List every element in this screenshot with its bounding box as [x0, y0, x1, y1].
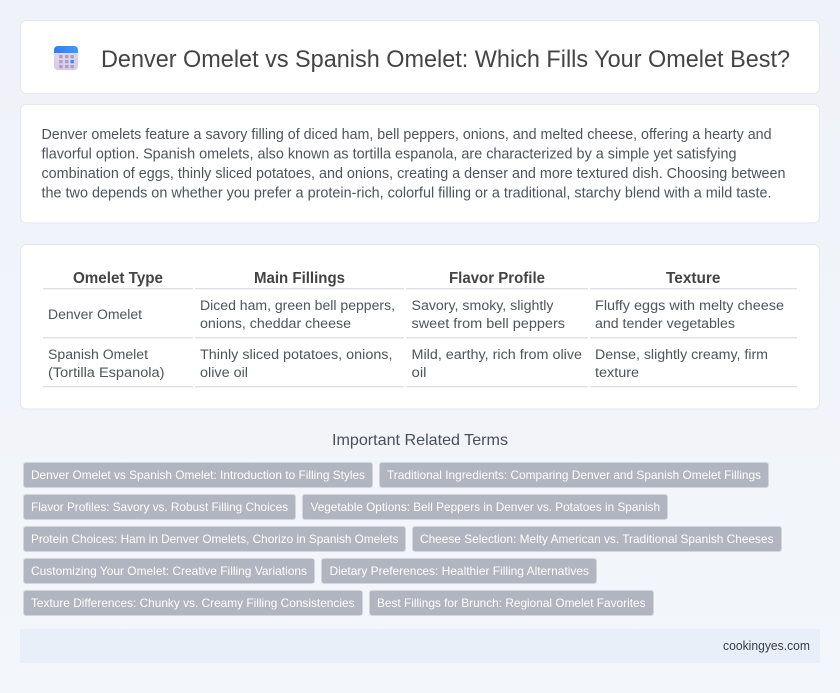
tag: flavor profiles	[24, 494, 296, 520]
table row: Spanish Omelet: olive oil	[200, 365, 248, 381]
table row: Spanish Omelet: Mild, earthy, rich from olive	[412, 347, 582, 363]
heading: important related terms: Important Related Terms	[332, 432, 508, 449]
footer source text: cookingyes.com	[723, 639, 810, 653]
table row: Spanish Omelet: Spanish Omelet	[48, 347, 148, 363]
table row: Spanish Omelet: (Tortilla Espanola)	[48, 365, 164, 381]
text block: introduction paragraph	[42, 127, 786, 201]
table header row: Omelet Type	[73, 270, 163, 287]
tag: best fillings for brunch	[370, 590, 654, 616]
tag: texture differences	[24, 590, 362, 616]
table row: Spanish Omelet: Dense, slightly creamy, firm	[595, 347, 768, 363]
table row: Denver Omelet: Diced ham, green bell peppers,	[200, 298, 395, 314]
tag: vegetable options: Vegetable Options: Bell Peppers in Denver vs. Potatoes in Spanish	[310, 500, 660, 514]
table row: Denver Omelet: Denver Omelet	[48, 307, 142, 323]
table row: Spanish Omelet	[48, 347, 768, 381]
panel: comparison table	[20, 244, 820, 409]
icon: calendar	[54, 46, 78, 70]
table row: Spanish Omelet: texture	[595, 365, 639, 381]
table header row: Texture	[666, 270, 721, 287]
panel: related term tags	[24, 462, 782, 616]
tag: protein choices: Protein Choices: Ham in Denver Omelets, Chorizo in Spanish Omelets	[31, 532, 398, 546]
panel: header	[20, 20, 820, 94]
text block: introduction paragraph: combination of eggs, thinly sliced potatoes, and onions, creating a denser and more textured dish. Choosing between	[42, 166, 786, 182]
table row: Denver Omelet: and tender vegetables	[595, 316, 735, 332]
panel: introduction	[20, 104, 820, 223]
tag: introduction to filling styles: Denver Omelet vs Spanish Omelet: Introduction to Filling Styles	[31, 468, 365, 482]
footer	[20, 629, 820, 663]
tag: dietary preferences	[322, 558, 596, 584]
tag: cheese selection: Cheese Selection: Melty American vs. Traditional Spanish Cheeses	[420, 532, 774, 546]
table row: Spanish Omelet: Thinly sliced potatoes, onions,	[200, 347, 392, 363]
table row: Denver Omelet: onions, cheddar cheese	[200, 316, 351, 332]
table row: Denver Omelet	[48, 298, 784, 332]
title: Denver Omelet vs Spanish Omelet: Which Fills Your Omelet Best?	[101, 46, 790, 73]
tag: best fillings for brunch: Best Fillings for Brunch: Regional Omelet Favorites	[377, 596, 646, 610]
table header row	[73, 270, 721, 287]
tag: texture differences: Texture Differences: Chunky vs. Creamy Filling Consistencies	[31, 596, 354, 610]
text block: introduction paragraph: Denver omelets feature a savory filling of diced ham, bell peppers, onions, and melted cheese, offering a hearty and	[42, 127, 772, 143]
text block: introduction paragraph: the two depends on whether you prefer a protein-rich, colorful filling or a traditional, starchy blend with a mild taste.	[42, 185, 772, 201]
tag: introduction to filling styles	[24, 462, 372, 488]
table header row: Flavor Profile	[449, 270, 545, 287]
table row: Denver Omelet: sweet from bell peppers	[412, 316, 565, 332]
tag: customizing your omelet: Customizing Your Omelet: Creative Filling Variations	[31, 564, 307, 578]
tag: protein choices	[24, 526, 406, 552]
table row: Denver Omelet: Fluffy eggs with melty cheese	[595, 298, 784, 314]
tag: cheese selection	[412, 526, 782, 552]
tag: customizing your omelet	[24, 558, 314, 584]
tag: traditional ingredients: Traditional Ingredients: Comparing Denver and Spanish Omelet Fillings	[387, 468, 761, 482]
table row: Spanish Omelet: oil	[412, 365, 426, 381]
tag: traditional ingredients	[380, 462, 768, 488]
tag: dietary preferences: Dietary Preferences: Healthier Filling Alternatives	[330, 564, 589, 578]
table row: Denver Omelet: Savory, smoky, slightly	[412, 298, 554, 314]
text block: introduction paragraph: flavorful option. Spanish omelets, also known as tortilla espanola, are characterized by a simple yet satisfying	[42, 146, 736, 162]
table header row: Main Fillings	[254, 270, 345, 287]
tag: flavor profiles: Flavor Profiles: Savory vs. Robust Filling Choices	[31, 500, 288, 514]
tag: vegetable options	[302, 494, 668, 520]
